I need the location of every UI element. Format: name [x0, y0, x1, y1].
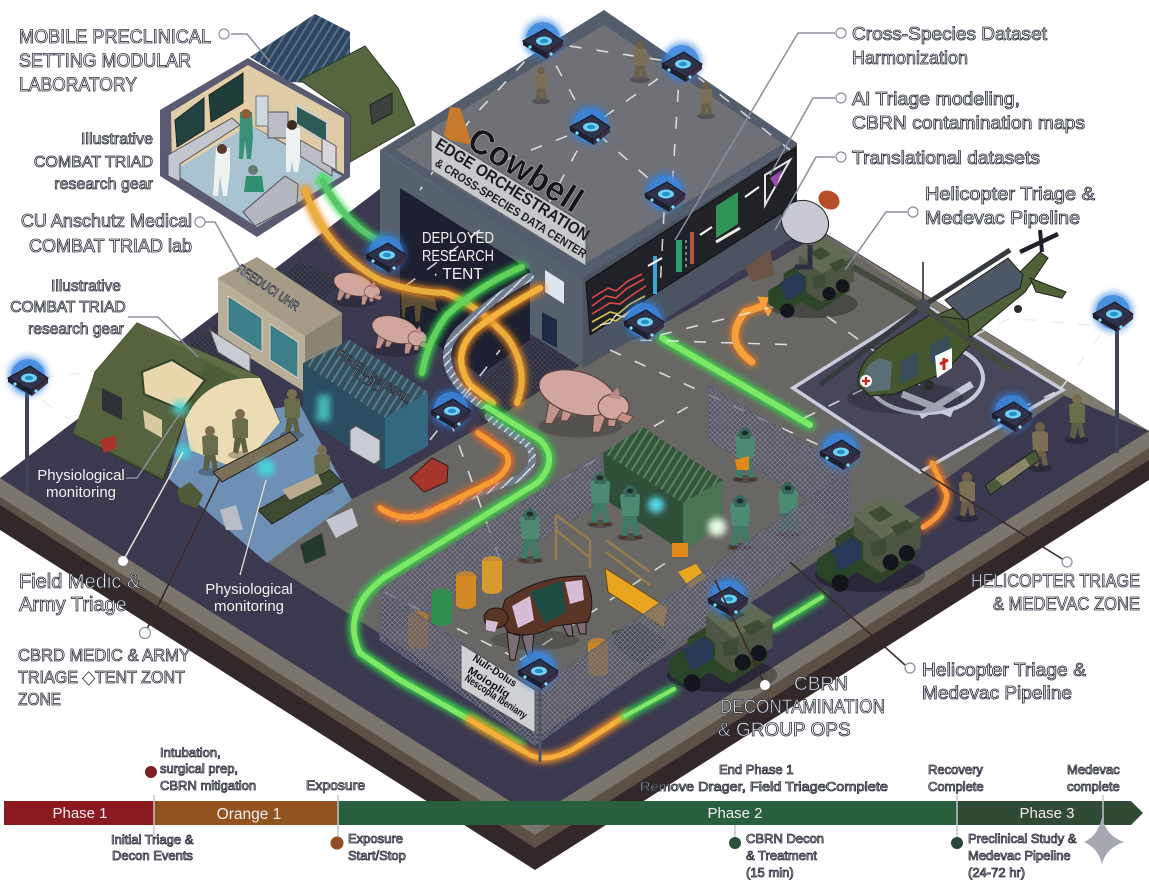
timeline labels: Recovery [928, 762, 983, 777]
label: CU Anschutz lab: COMBAT TRIAD lab [29, 236, 192, 256]
label: physiological monitoring right: Physiological [205, 581, 293, 598]
pig 3 large [534, 362, 633, 438]
timeline labels: CBRN mitigation [160, 778, 256, 793]
label: helicopter zone [971, 571, 1140, 614]
medics and stretchers [198, 389, 342, 524]
label: helicopter pipeline upper: Medevac Pipeline [925, 208, 1080, 228]
label: mobile preclinical [19, 27, 211, 96]
door and poster [542, 270, 564, 348]
building sign: & CROSS-SPECIES DATA CENTER [432, 156, 589, 261]
lab staff [213, 109, 300, 196]
panel: stretcher team and sentries [532, 41, 1089, 522]
label: helicopter pipeline lower: Helicopter Triage & [922, 660, 1086, 680]
green mast pipe [422, 267, 522, 373]
panel: isometric base platform [0, 185, 1149, 870]
pig 2 [369, 311, 429, 357]
node pole right [1115, 330, 1119, 453]
panel: medical triage tent [73, 323, 358, 564]
zone sign: Nulr-Dolus [470, 652, 519, 690]
marker: decon [729, 837, 741, 849]
timeline labels: (24-72 hr) [968, 865, 1025, 880]
label: deployed research tent: RESEARCH [422, 248, 494, 265]
building sign: EDGE ORCHESTRATION [432, 135, 592, 245]
label: mobile preclinical: SETTING MODULAR [19, 51, 191, 72]
label: helicopter zone: & MEDEVAC ZONE [993, 594, 1140, 614]
label: translational: Translational datasets [852, 148, 1040, 168]
panel: blue preclinical container [303, 340, 428, 470]
lab desks [168, 96, 336, 226]
timeline labels [111, 745, 1120, 880]
label: CU Anschutz lab [21, 211, 192, 256]
label: helicopter pipeline upper: Helicopter Triage & [925, 184, 1095, 204]
wall monitors [175, 73, 327, 147]
label: illustrative gear upper: Illustrative [81, 131, 153, 148]
label: CBRN decontamination: DECONTAMINATION [720, 697, 885, 718]
timeline labels: Medevac Pipeline [968, 848, 1071, 863]
yellow barriers [556, 456, 749, 628]
camo bag [612, 622, 668, 665]
timeline labels: Decon Events [112, 848, 193, 863]
timeline ticks [154, 795, 1103, 845]
node group [8, 19, 1133, 689]
label: CBRN decontamination: CBRN [794, 674, 848, 695]
phase 2 bar: Phase 2 [707, 805, 763, 822]
label: physiological monitoring left: Physiological [37, 467, 125, 484]
phase 2 bar [338, 801, 957, 825]
label: CU Anschutz lab: CU Anschutz Medical [21, 211, 192, 231]
label: cross-species [852, 24, 1047, 68]
tent floor [168, 405, 352, 563]
roof network dashes [400, 42, 790, 290]
label: deployed research tent: · TENT [433, 266, 483, 283]
timeline labels: Exposure [306, 777, 365, 793]
label: mobile preclinical: LABORATORY [19, 75, 137, 96]
label: cross-species: Cross-Species Dataset [852, 24, 1047, 44]
timeline labels: Intubation, [160, 745, 221, 760]
led data wall screen [586, 147, 796, 335]
label: field medic: Field Medic & [19, 571, 141, 593]
timeline labels: & Treatment [746, 848, 817, 863]
panel: dark fenced area under building [480, 320, 585, 425]
label: illustrative gear upper: research gear [54, 176, 154, 193]
satellite dish [774, 187, 843, 267]
label: field medic [19, 571, 141, 616]
label: AI triage: CBRN contamination maps [852, 113, 1085, 133]
pig 1 [331, 269, 382, 307]
harness animal [400, 290, 438, 322]
leader lines and anchors [118, 28, 1072, 690]
rooftop logo: Cowbell: Cowbell [461, 120, 590, 221]
tail boom and fin [930, 252, 1048, 346]
kit bags [100, 435, 358, 564]
main green pipeline [354, 407, 549, 745]
green tapered arrow [662, 338, 810, 425]
phase 3 bar [957, 801, 1143, 825]
node pole left [25, 390, 29, 495]
panel: concrete plaza [267, 233, 1065, 735]
timeline labels: Exposure [348, 831, 403, 846]
timeline labels: CBRN Decon [746, 831, 824, 846]
label: illustrative gear lower: research gear [28, 321, 124, 338]
label: AI triage [852, 89, 1085, 133]
zone sign: Moiopliq [465, 664, 512, 701]
panel: glowing data pipelines [305, 174, 947, 758]
panel: blue preclinical container: LOO [350, 368, 384, 395]
panel: helipad [793, 305, 1063, 472]
panel: blue preclinical container: PRELIMINAL [333, 348, 414, 407]
label: physiological monitoring right: monitoring [214, 598, 284, 615]
bottom road pipeline [470, 597, 822, 758]
label: deployed research tent: DEPLOYED [422, 230, 494, 247]
label: CBRD medic zone [18, 645, 190, 709]
label: illustrative gear lower: COMBAT TRIAD [10, 299, 126, 316]
label: illustrative gear lower [10, 278, 126, 338]
label: helicopter pipeline lower: Medevac Pipeline [922, 683, 1072, 703]
green tent behind lab [300, 46, 415, 162]
orange inner loop [380, 433, 508, 517]
phase 1 bar [4, 801, 154, 825]
label: illustrative gear upper [34, 131, 154, 193]
timeline [4, 745, 1143, 880]
label: CBRN decontamination: & GROUP OPS [718, 720, 851, 741]
timeline labels: Start/Stop [348, 848, 406, 863]
orange 1 bar [154, 801, 338, 825]
label: CBRD medic zone: TRIAGE ◆TENT ZONT [18, 667, 185, 687]
marker: study [951, 837, 963, 849]
panel: army trucks [667, 494, 925, 692]
label: deployed research tent [422, 230, 494, 283]
timeline labels: Medevac [1067, 762, 1120, 777]
label: illustrative gear upper: COMBAT TRIAD [34, 154, 153, 171]
timeline labels: Remove Drager, Field TriageComplete [640, 779, 888, 794]
barrels [408, 556, 608, 676]
green container [603, 427, 726, 552]
label: CBRD medic zone: ZONE [18, 689, 61, 709]
panel: cream container lab: REEDUCI UHR [234, 261, 302, 314]
fuselage [858, 315, 970, 396]
timeline labels: Preclinical Study & [968, 831, 1077, 846]
decon crew [517, 427, 801, 564]
panel: animals [331, 269, 633, 438]
orange zone pipe [923, 463, 947, 527]
panel: cream container lab [210, 257, 342, 392]
label: physiological monitoring left [37, 467, 125, 501]
label: mobile preclinical: MOBILE PRECLINICAL [19, 27, 211, 48]
panel: red gear case [410, 458, 448, 492]
label: physiological monitoring left: monitoring [46, 484, 116, 501]
label: CBRN decontamination [718, 674, 885, 741]
timeline labels: surgical prep, [160, 761, 238, 776]
phase 3 bar: Phase 3 [1019, 805, 1075, 822]
label: physiological monitoring right [205, 581, 293, 615]
front fence [380, 470, 850, 745]
timeline labels: Complete [928, 779, 984, 794]
label: cross-species: Harmonization [852, 48, 968, 68]
panel: plaza network dashes [15, 300, 1100, 670]
timeline labels: Initial Triage & [111, 832, 194, 847]
phase 1 bar: Phase 1 [52, 805, 108, 822]
label: helicopter pipeline upper [925, 184, 1095, 228]
belt conveyor [395, 277, 532, 518]
label: illustrative gear lower: Illustrative [51, 278, 121, 295]
panel: network nodes [8, 19, 1133, 689]
panel: mobile preclinical modular lab [160, 14, 415, 237]
zone sign: Nescopla Ibeniany [462, 672, 529, 722]
rooftop sentries [532, 41, 715, 119]
cow [484, 576, 592, 660]
dark bay of deployed research tent [400, 188, 530, 375]
timeline labels: End Phase 1 [719, 762, 793, 777]
label: AI triage: AI Triage modeling, [852, 89, 1020, 109]
panel: satellite truck and dish [745, 187, 858, 318]
orange 1 bar: Orange 1 [217, 806, 281, 823]
icon: medevac star [1084, 817, 1124, 864]
label: field medic: Army Triage [19, 594, 127, 616]
timeline labels: (15 min) [746, 865, 794, 880]
orange arrow [735, 297, 778, 362]
orange tent pipe [461, 288, 540, 403]
label: CBRD medic zone: CBRD MEDIC & ARMY [18, 645, 190, 665]
timeline labels: complete [1067, 779, 1120, 794]
blue roof container [250, 14, 350, 85]
panel: central data center building [380, 10, 797, 375]
marker: intubation [145, 766, 157, 778]
rotor [820, 250, 1010, 385]
panel: medevac helicopter [820, 230, 1066, 414]
holographic monitors [172, 400, 275, 477]
lab pipes [305, 174, 522, 403]
zone sign [461, 644, 535, 733]
marker: exposure [330, 836, 344, 850]
back fence [380, 385, 850, 640]
panel: CBRN decontamination compound [380, 385, 850, 762]
label: helicopter pipeline lower [922, 660, 1086, 703]
